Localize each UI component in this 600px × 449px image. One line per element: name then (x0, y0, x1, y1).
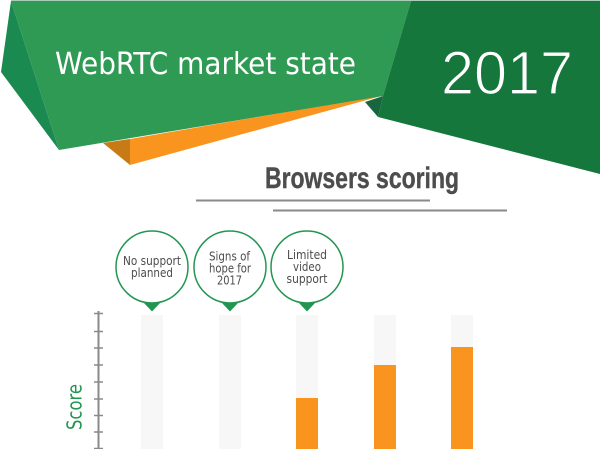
year panel (378, 1, 600, 174)
dark green fold (365, 96, 383, 117)
callout: limited video support (271, 231, 343, 312)
callout: no support planned (116, 231, 188, 312)
main green panel (11, 1, 411, 150)
bar chart (141, 315, 473, 449)
callout: signs of hope for 2017: hope for (209, 260, 252, 276)
axis label: Score (62, 384, 86, 430)
title: WebRTC market state (55, 47, 356, 82)
callout: no support planned: No support (123, 253, 181, 268)
callout: signs of hope for 2017: 2017 (217, 272, 242, 288)
bar 1 (141, 315, 163, 449)
callout: limited video support: Limited (287, 247, 327, 262)
score axis (94, 311, 103, 449)
callout: limited video support: support (286, 271, 328, 286)
left green fold (1, 1, 59, 150)
callout: limited video support: video (293, 259, 321, 274)
bar 4 (374, 315, 396, 449)
heading: browsers scoring: Browsers scoring (265, 162, 459, 195)
bar 2 (219, 315, 241, 449)
bar 5 (451, 315, 473, 449)
top edge strip (11, 0, 600, 1)
orange ribbon (130, 95, 385, 165)
header banner (1, 0, 600, 174)
year: 2017 (441, 39, 573, 107)
heading underlines (196, 200, 507, 210)
callout: no support planned: planned (131, 265, 173, 280)
orange ribbon fold (103, 139, 130, 165)
bar 3 (296, 315, 318, 449)
callout: signs of hope for 2017 (194, 231, 266, 312)
callout: signs of hope for 2017: Signs of (209, 248, 250, 264)
